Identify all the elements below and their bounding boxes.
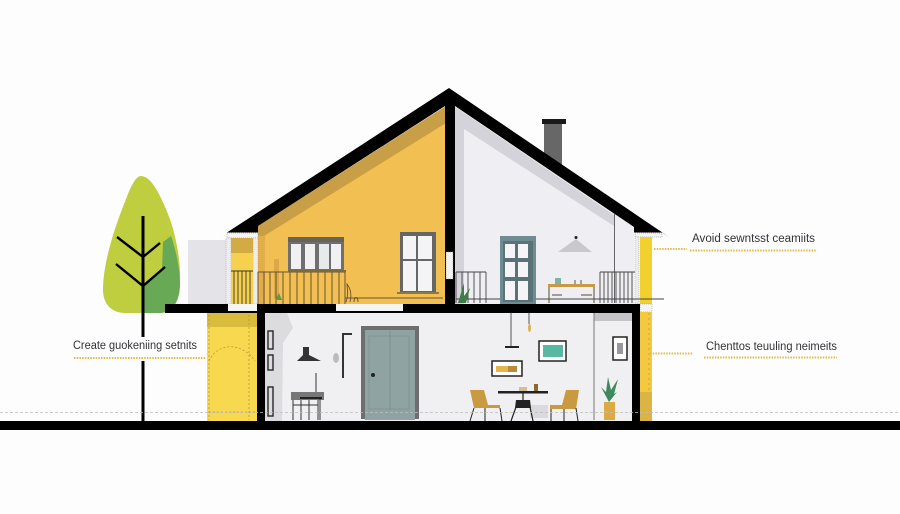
right dining chair: [550, 390, 579, 421]
upper floor railing: [258, 272, 443, 304]
upper floor left balcony column: [226, 233, 258, 304]
left dining chair: [470, 390, 502, 421]
callout: Create guokeniing setnits: Create guokeniing setnits: [73, 340, 197, 352]
window: tall: [397, 232, 439, 294]
right upper yellow column: [635, 233, 662, 312]
grey annex behind house: [188, 240, 226, 304]
right balcony railing: [456, 272, 664, 303]
roof: [220, 88, 669, 304]
icon: tree: [103, 176, 180, 421]
callout: Chenttos teuuling neimeits: [650, 341, 837, 358]
wall bracket: [333, 334, 352, 378]
upper floor left: yellow wall: [258, 106, 446, 304]
upper floor right: white wall: [454, 106, 634, 304]
callout: Chenttos teuuling neimeits: Chenttos teuuling neimeits: [706, 341, 837, 353]
lower left yellow wall: [207, 313, 257, 421]
icon: black pendant lamp: [297, 347, 321, 361]
icon: hanging lamp upstairs: [558, 236, 592, 252]
structural walls: [257, 313, 265, 421]
balcony door: [500, 236, 536, 304]
front door: [361, 326, 419, 420]
lower right yellow wall: [640, 312, 652, 421]
floor slab: [165, 304, 640, 313]
grey wall picture: [613, 337, 627, 360]
teal wall picture: [539, 341, 566, 361]
callout: Create guokeniing setnits: [73, 340, 206, 358]
chimney: [542, 119, 566, 165]
ceiling pendants: [505, 313, 531, 348]
window: triple: [288, 237, 346, 272]
curved chair outline: [346, 284, 358, 302]
dining table: [498, 384, 548, 421]
dashed ground datum line: [0, 412, 900, 414]
column hatch patch: [446, 252, 453, 279]
orange wall picture: [492, 361, 522, 376]
lower floor interior: [265, 313, 632, 421]
desk and stool: [291, 373, 324, 420]
icon: plant on right balcony: [458, 283, 470, 303]
balcony table: [548, 278, 595, 303]
potted plant: [601, 377, 618, 420]
callout: Avoid sewntsst ceamiits: Avoid sewntsst ceamiits: [692, 233, 815, 245]
left wall frames: [268, 331, 273, 416]
icon: plant on left balcony: [275, 293, 282, 300]
ground line: [0, 421, 900, 430]
